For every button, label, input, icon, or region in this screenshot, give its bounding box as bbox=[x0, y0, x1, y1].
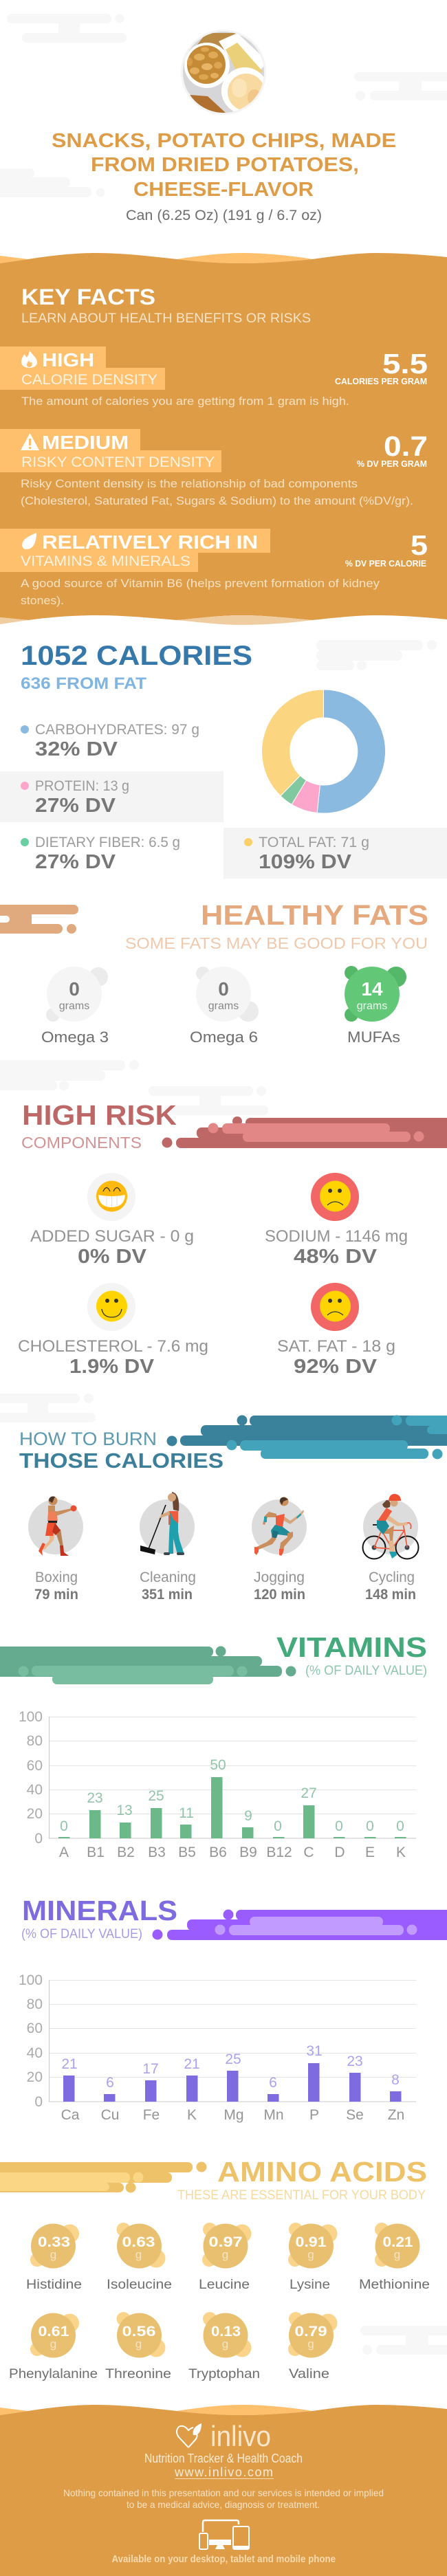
bubble: phenylalanine: g bbox=[50, 2337, 56, 2351]
bubble: mufas: grams bbox=[357, 1000, 387, 1012]
panel: vitamins bbox=[0, 1631, 427, 1860]
bar chart: minerals: 80 bbox=[27, 1996, 43, 2012]
bar chart: vitamins: K bbox=[396, 1845, 406, 1860]
fact: rich in vitamins and minerals: A good source of Vitamin B6 (helps prevent formation of kidney bbox=[21, 577, 380, 590]
icon: warning triangle bbox=[21, 433, 39, 450]
bubble: omega 6 bbox=[190, 967, 259, 1046]
bar chart: vitamins: 0 bbox=[335, 1818, 343, 1834]
decoration: green bars bbox=[0, 1646, 296, 1684]
bar chart: vitamins: 11 bbox=[179, 1805, 194, 1821]
bar chart: minerals: 20 bbox=[27, 2069, 43, 2085]
bubble: omega 3 bbox=[41, 967, 109, 1046]
bubble: isoleucine: Isoleucine bbox=[107, 2277, 172, 2292]
bar chart: vitamins: E bbox=[365, 1845, 375, 1860]
legend: dietary fiber: 27% DV bbox=[35, 851, 116, 873]
activity labels: Cleaning bbox=[140, 1570, 196, 1585]
serving size: Can (6.25 Oz) (191 g / 6.7 oz) bbox=[126, 208, 322, 223]
bar chart: minerals: 100 bbox=[19, 1972, 43, 1988]
legend: total fat: TOTAL FAT: 71 g bbox=[259, 835, 369, 850]
bar chart: vitamins: 0 bbox=[60, 1818, 68, 1834]
panel: burn calories bbox=[19, 1415, 447, 1603]
item: cholesterol bbox=[18, 1283, 208, 1378]
heading: key facts: KEY FACTS bbox=[21, 285, 155, 309]
panel: high risk components bbox=[18, 1099, 447, 1378]
bar chart: vitamins: 0 bbox=[366, 1818, 374, 1834]
bubble: leucine bbox=[199, 2223, 252, 2292]
bar chart: minerals: 23 bbox=[347, 2054, 363, 2069]
fact: rich in vitamins and minerals: stones). bbox=[21, 595, 64, 607]
activity labels: 79 min bbox=[34, 1587, 78, 1603]
heading: healthy fats: HEALTHY FATS bbox=[201, 899, 428, 931]
bar chart: vitamins: 27 bbox=[301, 1785, 317, 1801]
bubble: omega 6: Omega 6 bbox=[190, 1028, 258, 1046]
heading: amino acids: AMINO ACIDS bbox=[217, 2156, 427, 2188]
subheading: SOME FATS MAY BE GOOD FOR YOU bbox=[125, 934, 428, 952]
bubble: lysine: 0.91 bbox=[296, 2234, 327, 2250]
activity: cleaning bbox=[140, 1492, 195, 1555]
disclaimer bbox=[63, 2487, 384, 2510]
heading: high risk: HIGH RISK bbox=[22, 1099, 177, 1131]
subheading: components: COMPONENTS bbox=[21, 1134, 142, 1152]
bubble: tryptophan bbox=[188, 2312, 260, 2381]
bar chart: minerals: Cu bbox=[101, 2107, 119, 2123]
bubble: leucine: g bbox=[222, 2248, 228, 2261]
fact: rich in vitamins and minerals: % DV PER CALORIE bbox=[345, 558, 426, 569]
title bbox=[52, 130, 396, 201]
bar chart: vitamins: 0 bbox=[34, 1831, 43, 1847]
item: sodium bbox=[265, 1173, 408, 1268]
legend: protein: PROTEIN: 13 g bbox=[35, 778, 129, 794]
bar chart: minerals: 17 bbox=[142, 2061, 159, 2077]
legend: dietary fiber bbox=[21, 835, 180, 873]
panel: key facts bbox=[0, 253, 447, 625]
decoration: teal bars bbox=[166, 1415, 447, 1459]
bubble: mufas: MUFAs bbox=[347, 1028, 400, 1046]
donut chart bbox=[262, 690, 386, 813]
bar chart: vitamins: B1 bbox=[87, 1845, 105, 1860]
bar chart: vitamins bbox=[19, 1709, 416, 1860]
bubble: histidine bbox=[26, 2223, 82, 2292]
item: added sugar: ADDED SUGAR - 0 g bbox=[30, 1227, 194, 1246]
bubble: methionine: Methionine bbox=[359, 2277, 430, 2292]
fact: calorie density bbox=[0, 346, 428, 408]
fact: risky content density bbox=[0, 429, 428, 507]
bar chart: vitamins: 50 bbox=[210, 1757, 226, 1773]
bubble: omega 3: Omega 3 bbox=[41, 1028, 109, 1046]
fact: calorie density: 5.5 bbox=[382, 348, 428, 379]
bar chart: minerals: Mn bbox=[263, 2107, 284, 2123]
bar chart: vitamins: 13 bbox=[116, 1803, 133, 1818]
activity: boxing bbox=[28, 1496, 83, 1556]
legend: total fat: 109% DV bbox=[259, 851, 352, 873]
legend: carbohydrates bbox=[21, 722, 199, 760]
item: sodium: SODIUM - 1146 mg bbox=[265, 1227, 408, 1246]
heading: HOW TO BURN bbox=[19, 1429, 157, 1449]
bar chart: vitamins: B9 bbox=[239, 1845, 257, 1860]
bubble: threonine: 0.56 bbox=[122, 2324, 155, 2340]
item: added sugar bbox=[30, 1173, 194, 1268]
bubble: lysine: g bbox=[307, 2248, 314, 2261]
bubble: omega 6: grams bbox=[208, 1000, 239, 1012]
bubble: tryptophan: 0.13 bbox=[211, 2324, 241, 2340]
bubble: isoleucine: g bbox=[135, 2248, 142, 2261]
item: added sugar: 0% DV bbox=[78, 1246, 147, 1268]
icon: leaf bbox=[22, 533, 36, 549]
bar chart: vitamins: C bbox=[303, 1845, 314, 1860]
panel: amino acids bbox=[0, 2156, 430, 2381]
panel: healthy fats bbox=[0, 899, 428, 1046]
bar chart: vitamins: 25 bbox=[148, 1788, 164, 1804]
legend: carbohydrates: 32% DV bbox=[35, 738, 118, 760]
bar chart: vitamins: 0 bbox=[274, 1818, 282, 1834]
bubble: valine: g bbox=[307, 2337, 314, 2351]
fact: risky content density: 0.7 bbox=[384, 430, 428, 462]
bubble: leucine: 0.97 bbox=[209, 2234, 242, 2250]
bar chart: minerals: 40 bbox=[27, 2045, 43, 2061]
subheading: from fat: 636 FROM FAT bbox=[21, 674, 146, 693]
fact: rich in vitamins and minerals: RELATIVELY RICH IN bbox=[42, 531, 258, 553]
bar chart: minerals: Zn bbox=[388, 2107, 404, 2123]
bar chart: minerals: 31 bbox=[306, 2043, 323, 2059]
bar chart: minerals: 21 bbox=[184, 2056, 200, 2072]
bubble: leucine: Leucine bbox=[199, 2277, 250, 2292]
item: saturated fat: 92% DV bbox=[294, 1356, 378, 1378]
heading: THOSE CALORIES bbox=[19, 1449, 224, 1473]
bubble: phenylalanine bbox=[9, 2313, 98, 2381]
bar chart: minerals: 60 bbox=[27, 2021, 43, 2036]
heading: vitamins: VITAMINS bbox=[276, 1631, 427, 1663]
bubble: lysine bbox=[288, 2223, 337, 2292]
fact: calorie density: CALORIES PER GRAM bbox=[335, 376, 427, 386]
bubble: threonine bbox=[105, 2312, 171, 2381]
panel: calories bbox=[0, 641, 447, 879]
bubble: lysine: Lysine bbox=[290, 2277, 330, 2292]
bubble: threonine: g bbox=[135, 2337, 142, 2351]
bar chart: vitamins: B6 bbox=[209, 1845, 227, 1860]
bubble: methionine: g bbox=[394, 2248, 400, 2261]
activity labels: 148 min bbox=[365, 1587, 416, 1603]
bar chart: vitamins: 23 bbox=[87, 1790, 103, 1806]
bubble: isoleucine: 0.63 bbox=[122, 2234, 155, 2250]
title: SNACKS, POTATO CHIPS, MADE bbox=[52, 130, 396, 152]
bar chart: minerals: P bbox=[309, 2107, 319, 2123]
bar chart: vitamins: D bbox=[334, 1845, 345, 1860]
footer bbox=[0, 2405, 447, 2576]
activity labels: Boxing bbox=[35, 1570, 78, 1585]
bubble: mufas bbox=[345, 966, 406, 1046]
bar chart: vitamins: 60 bbox=[27, 1758, 43, 1774]
disclaimer: to be a medical advice, diagnosis or treatment. bbox=[127, 2499, 320, 2510]
activity labels: Jogging bbox=[254, 1570, 305, 1585]
icon: flame bbox=[21, 350, 37, 368]
decoration: orange bars bbox=[0, 905, 78, 934]
bar chart: vitamins: B2 bbox=[117, 1845, 135, 1860]
bubble: mufas: 14 bbox=[361, 978, 383, 1000]
heading bbox=[19, 1429, 224, 1473]
bubble: phenylalanine: 0.61 bbox=[39, 2324, 69, 2340]
bubble: histidine: g bbox=[50, 2248, 56, 2261]
bar chart: minerals: 21 bbox=[61, 2056, 78, 2072]
fact: rich in vitamins and minerals: 5 bbox=[411, 529, 428, 561]
tagline: Nutrition Tracker & Health Coach bbox=[144, 2452, 303, 2465]
legend: dietary fiber: DIETARY FIBER: 6.5 g bbox=[35, 835, 180, 850]
logo: inlivo: inlivo bbox=[210, 2420, 271, 2452]
bar chart: minerals: K bbox=[187, 2107, 197, 2123]
activity: jogging bbox=[252, 1497, 307, 1556]
bar chart: minerals: 0 bbox=[34, 2094, 43, 2110]
bar chart: minerals: 25 bbox=[225, 2051, 241, 2067]
bar chart: minerals: 6 bbox=[106, 2075, 114, 2091]
bar chart: minerals: Fe bbox=[143, 2107, 160, 2123]
bar chart: minerals: 8 bbox=[391, 2072, 400, 2088]
activity: cycling bbox=[363, 1494, 418, 1559]
title: CHEESE-FLAVOR bbox=[133, 179, 314, 201]
legend: protein bbox=[21, 778, 129, 817]
bubble: omega 3: 0 bbox=[69, 978, 80, 1000]
bar chart: minerals: Mg bbox=[224, 2107, 244, 2123]
item: cholesterol: 1.9% DV bbox=[69, 1356, 155, 1378]
item: sodium: 48% DV bbox=[294, 1246, 378, 1268]
bubble: valine bbox=[288, 2312, 337, 2381]
activity labels bbox=[34, 1570, 416, 1603]
decoration: purple bars bbox=[153, 1910, 447, 1940]
fact: risky content density: Risky Content density is the relationship of bad components bbox=[21, 478, 358, 490]
activity labels: Cycling bbox=[369, 1570, 415, 1585]
bar chart: vitamins: A bbox=[59, 1845, 69, 1860]
activity labels: 351 min bbox=[142, 1587, 193, 1603]
item: cholesterol: CHOLESTEROL - 7.6 mg bbox=[18, 1337, 208, 1356]
fact: risky content density: % DV PER GRAM bbox=[357, 459, 427, 469]
bar chart: vitamins: B12 bbox=[266, 1845, 292, 1860]
bubble: threonine: Threonine bbox=[105, 2366, 171, 2381]
legend: protein: 27% DV bbox=[35, 795, 116, 817]
fact: calorie density: HIGH bbox=[42, 349, 94, 371]
fact: risky content density: (Cholesterol, Saturated Fat, Sugars & Sodium) to the amount (%DV/gr). bbox=[21, 495, 413, 507]
bar chart: vitamins: B3 bbox=[148, 1845, 166, 1860]
legend: total fat bbox=[244, 835, 369, 873]
bubble: histidine: 0.33 bbox=[38, 2234, 70, 2250]
bubble: histidine: Histidine bbox=[26, 2277, 82, 2292]
bar chart: minerals: 6 bbox=[269, 2075, 277, 2091]
item: saturated fat bbox=[277, 1283, 395, 1378]
bubble: tryptophan: g bbox=[222, 2337, 228, 2351]
title: FROM DRIED POTATOES, bbox=[91, 154, 359, 176]
bar chart: vitamins: 80 bbox=[27, 1733, 43, 1749]
heading: calories: 1052 CALORIES bbox=[21, 641, 252, 671]
subheading: (% OF DAILY VALUE) bbox=[21, 1927, 142, 1941]
fact: risky content density: MEDIUM bbox=[42, 432, 129, 453]
bubble: valine: Valine bbox=[289, 2366, 329, 2381]
fact: calorie density: CALORIE DENSITY bbox=[21, 372, 157, 388]
bar chart: vitamins: 0 bbox=[396, 1818, 404, 1834]
bar chart: vitamins: 100 bbox=[19, 1709, 43, 1725]
bar chart: vitamins: B5 bbox=[178, 1845, 196, 1860]
bar chart: minerals bbox=[19, 1972, 416, 2123]
decoration: red bars bbox=[162, 1116, 447, 1148]
fact: calorie density: The amount of calories you are getting from 1 gram is high. bbox=[21, 395, 349, 408]
bubble: phenylalanine: Phenylalanine bbox=[9, 2366, 98, 2381]
legend backgrounds bbox=[0, 771, 447, 879]
bubble: omega 3: grams bbox=[59, 1000, 89, 1012]
website link: www.inlivo.com bbox=[174, 2465, 273, 2479]
availability note: Available on your desktop, tablet and mobile phone bbox=[111, 2553, 336, 2565]
bar chart: minerals: Ca bbox=[61, 2107, 80, 2123]
bar chart: vitamins: 20 bbox=[27, 1806, 43, 1822]
decoration: yellow bars bbox=[0, 2161, 206, 2193]
logo: inlivo bbox=[177, 2420, 271, 2452]
bar chart: vitamins: 40 bbox=[27, 1782, 43, 1798]
bubble: isoleucine bbox=[107, 2223, 172, 2292]
fact: rich in vitamins and minerals: VITAMINS & MINERALS bbox=[21, 553, 190, 569]
subheading: THESE ARE ESSENTIAL FOR YOUR BODY bbox=[177, 2188, 426, 2203]
legend: carbohydrates: CARBOHYDRATES: 97 g bbox=[35, 722, 199, 738]
food photo bbox=[180, 29, 268, 117]
fact: rich in vitamins and minerals bbox=[0, 529, 428, 607]
fact: risky content density: RISKY CONTENT DENSITY bbox=[21, 454, 215, 470]
bubble: methionine: 0.21 bbox=[382, 2234, 413, 2250]
panel: minerals bbox=[19, 1895, 447, 2123]
bubble: omega 6: 0 bbox=[218, 978, 229, 1000]
item: saturated fat: SAT. FAT - 18 g bbox=[277, 1337, 395, 1356]
bar chart: minerals: Se bbox=[346, 2107, 364, 2123]
heading: minerals: MINERALS bbox=[22, 1895, 177, 1926]
subheading: (% OF DAILY VALUE) bbox=[305, 1664, 427, 1678]
disclaimer: Nothing contained in this presentation and our services is intended or implied bbox=[63, 2487, 384, 2498]
bubble: methionine bbox=[359, 2223, 430, 2292]
bubble: tryptophan: Tryptophan bbox=[188, 2366, 260, 2381]
bar chart: vitamins: 9 bbox=[244, 1808, 252, 1824]
bubble: valine: 0.79 bbox=[294, 2324, 327, 2340]
activity labels: 120 min bbox=[254, 1587, 305, 1603]
subheading: LEARN ABOUT HEALTH BENEFITS OR RISKS bbox=[21, 311, 311, 326]
icon: devices bbox=[199, 2520, 249, 2549]
